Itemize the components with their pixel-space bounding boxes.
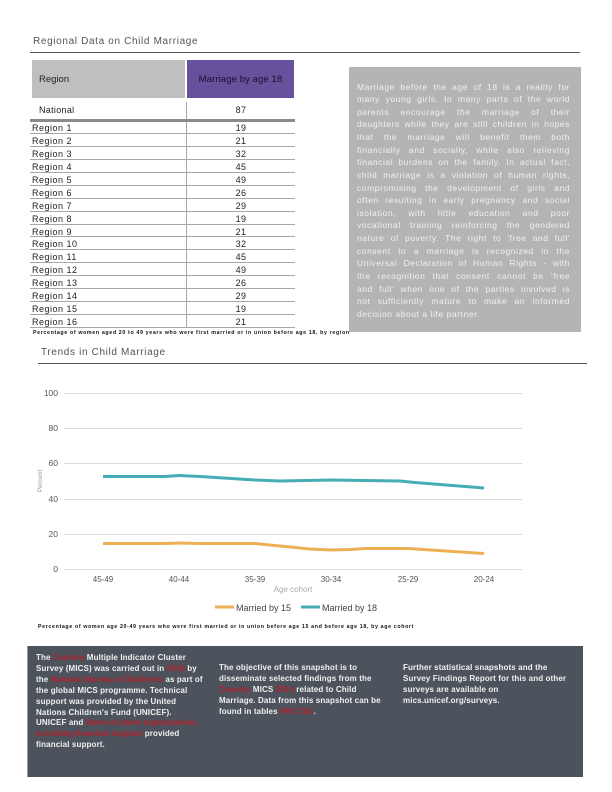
table rows: regions 1 to 16: Region 9 [32, 227, 72, 237]
table rows: regions 1 to 16: Region 10 [32, 239, 78, 249]
x axis labels: 20-24 [474, 575, 495, 584]
table rows: regions 1 to 16: Region 15 [32, 304, 78, 314]
table rows: regions 1 to 16: 32 [236, 239, 246, 249]
text block: objective: Country MICS 2014 related to Child [219, 685, 356, 694]
text block: child marriage explanation: not sufficiently mature to make an informed [357, 296, 570, 306]
legend: married by 15: Married by 15 [236, 603, 291, 613]
x axis labels [93, 575, 495, 584]
text block: further snapshots: Survey Findings Report for this and other [403, 674, 566, 683]
caption: chart: Percentage of women age 20-49 years who were first married or in union before age 15 and before age 18, by age cohort [38, 624, 414, 630]
table rows: regions 1 to 16: 45 [236, 162, 246, 172]
text block: survey description: the National Bureau of Statistics as part of [36, 675, 203, 684]
text block: child marriage explanation: Marriage before the age of 18 is a reality for [357, 82, 570, 92]
text block: child marriage explanation: financially and socially, while also relieving [357, 145, 570, 155]
text block: survey description: Survey (MICS) was carried out in 2014 by [36, 664, 197, 673]
text block: child marriage explanation: the recognition that consent cannot be 'free [357, 271, 570, 281]
header cell: marriage by age 18 [187, 60, 294, 98]
x axis labels: 40-44 [169, 575, 190, 584]
text block: child marriage explanation: Universal Declaration of Human Rights - with [357, 258, 570, 268]
table rows: regions 1 to 16: Region 12 [32, 265, 78, 275]
table: regional data [32, 60, 294, 98]
legend: married by 18: Married by 18 [322, 603, 377, 613]
table rows: regions 1 to 16: Region 6 [32, 188, 72, 198]
header cell: region [32, 60, 185, 98]
table rows: regions 1 to 16: Region 14 [32, 291, 78, 301]
text block: child marriage explanation: vocational training reinforcing the gendered [357, 220, 570, 230]
text block: child marriage explanation: consent to a marriage is recognized in the [357, 246, 570, 256]
table rows: regions 1 to 16: Region 16 [32, 317, 78, 327]
y axis labels: 0 [53, 564, 58, 574]
table rows: regions 1 to 16: 29 [236, 201, 246, 211]
text block: child marriage explanation: financial burdens on the family. In actual fact, [357, 157, 570, 167]
table rows: regions 1 to 16 [32, 123, 246, 327]
text block: child marriage explanation: and full' when one of the parties involved is [357, 284, 570, 294]
table rows: regions 1 to 16: Region 1 [32, 123, 72, 133]
table rows: regions 1 to 16: 19 [236, 304, 246, 314]
table rows: regions 1 to 16: Region 5 [32, 175, 72, 185]
text block: further snapshots [403, 663, 566, 705]
heading: trends: Trends in Child Marriage [41, 347, 166, 358]
line chart: trends in child marriage [37, 388, 522, 613]
header cell: region: Region [39, 74, 69, 85]
table rows: regions 1 to 16: 49 [236, 175, 246, 185]
table rows: regions 1 to 16: Region 3 [32, 149, 72, 159]
text block: child marriage explanation: that the marriage will benefit them both [357, 132, 570, 142]
caption: table: Percentage of women aged 20 to 49 years who were first married or in union before age 18, by region [33, 330, 349, 336]
y axis labels: 60 [49, 458, 58, 468]
text block: survey description [36, 653, 203, 749]
text block: child marriage explanation: isolation, with little education and poor [357, 208, 570, 218]
x axis labels: 30-34 [321, 575, 342, 584]
text block: objective: Marriage. Data from this snapshot can be [219, 696, 381, 705]
y axis labels: 20 [49, 529, 58, 539]
table rows: regions 1 to 16: Region 7 [32, 201, 72, 211]
series: married by 15 [103, 543, 484, 554]
table rows: regions 1 to 16: 45 [236, 252, 246, 262]
y axis labels: 80 [49, 423, 58, 433]
table rows: regions 1 to 16: Region 8 [32, 214, 72, 224]
table row: national [30, 105, 295, 122]
table rows: regions 1 to 16: Region 11 [32, 252, 77, 262]
x axis title: Age cohort [274, 585, 313, 594]
header cell: marriage by age 18: Marriage by age 18 [199, 74, 282, 85]
table rows: regions 1 to 16: Region 13 [32, 278, 78, 288]
text block: survey description: The Country Multiple Indicator Cluster [36, 653, 186, 662]
table rows: regions 1 to 16: 21 [236, 227, 246, 237]
table rows: regions 1 to 16: 19 [236, 214, 246, 224]
text block: child marriage explanation: child marriage is a violation of human rights, [357, 170, 570, 180]
text block: further snapshots: Further statistical snapshots and the [403, 663, 547, 672]
table rows: regions 1 to 16: 32 [236, 149, 246, 159]
text block: survey description: UNICEF and Name of other organizations [36, 718, 197, 727]
y axis labels: 100 [44, 388, 58, 398]
series: married by 18 [103, 476, 484, 488]
text block: child marriage explanation: daughters while they are still children in hopes [357, 119, 570, 129]
text block: objective [219, 663, 381, 716]
text block: objective: found in tables PR1-TA1. [219, 707, 316, 716]
table rows: regions 1 to 16: 21 [236, 317, 246, 327]
table rows: regions 1 to 16: 29 [236, 291, 246, 301]
y axis title: Percent [37, 470, 44, 492]
text block: child marriage explanation: nature of poverty. The right to 'free and full' [357, 233, 570, 243]
text block: survey description: the global MICS programme. Technical [36, 686, 187, 695]
text block: survey description: providing financial support provided [36, 729, 179, 738]
table rows: regions 1 to 16: Region 2 [32, 136, 72, 146]
text block: further snapshots: surveys are available on [403, 685, 498, 694]
text block: child marriage explanation: parents encourage the marriage of their [357, 107, 570, 117]
text block: further snapshots: mics.unicef.org/surveys. [403, 696, 500, 705]
table rows: regions 1 to 16: Region 4 [32, 162, 72, 172]
x axis labels: 35-39 [245, 575, 266, 584]
panel: child marriage text [349, 67, 581, 332]
text block: child marriage explanation: many young girls. In many parts of the world [357, 94, 570, 104]
text block: survey description: financial support. [36, 740, 105, 749]
table rows: regions 1 to 16: 19 [236, 123, 246, 133]
text block: child marriage explanation: often resulting in early pregnancy and social [357, 195, 570, 205]
table row: national: 87 [236, 105, 246, 115]
text block: objective: The objective of this snapshot is to [219, 663, 357, 672]
text block: child marriage explanation: decision about a life partner. [357, 309, 480, 319]
x axis labels: 45-49 [93, 575, 114, 584]
text block: survey description: support was provided by the United [36, 697, 176, 706]
x axis labels: 25-29 [398, 575, 419, 584]
table rows: regions 1 to 16: 26 [236, 188, 246, 198]
text block: objective: disseminate selected findings from the [219, 674, 372, 683]
text block: survey description: Nations Children's Fund (UNICEF). [36, 708, 172, 717]
table row: national: National [39, 105, 74, 115]
text block: child marriage explanation [357, 82, 570, 319]
table rows: regions 1 to 16: 26 [236, 278, 246, 288]
y axis labels: 40 [49, 494, 58, 504]
y axis labels [44, 388, 58, 574]
heading: regional data: Regional Data on Child Marriage [33, 36, 198, 47]
panel: footer notes [27, 646, 583, 777]
table rows: regions 1 to 16: 21 [236, 136, 246, 146]
table rows: regions 1 to 16: 49 [236, 265, 246, 275]
text block: child marriage explanation: compromising the development of girls and [357, 183, 570, 193]
